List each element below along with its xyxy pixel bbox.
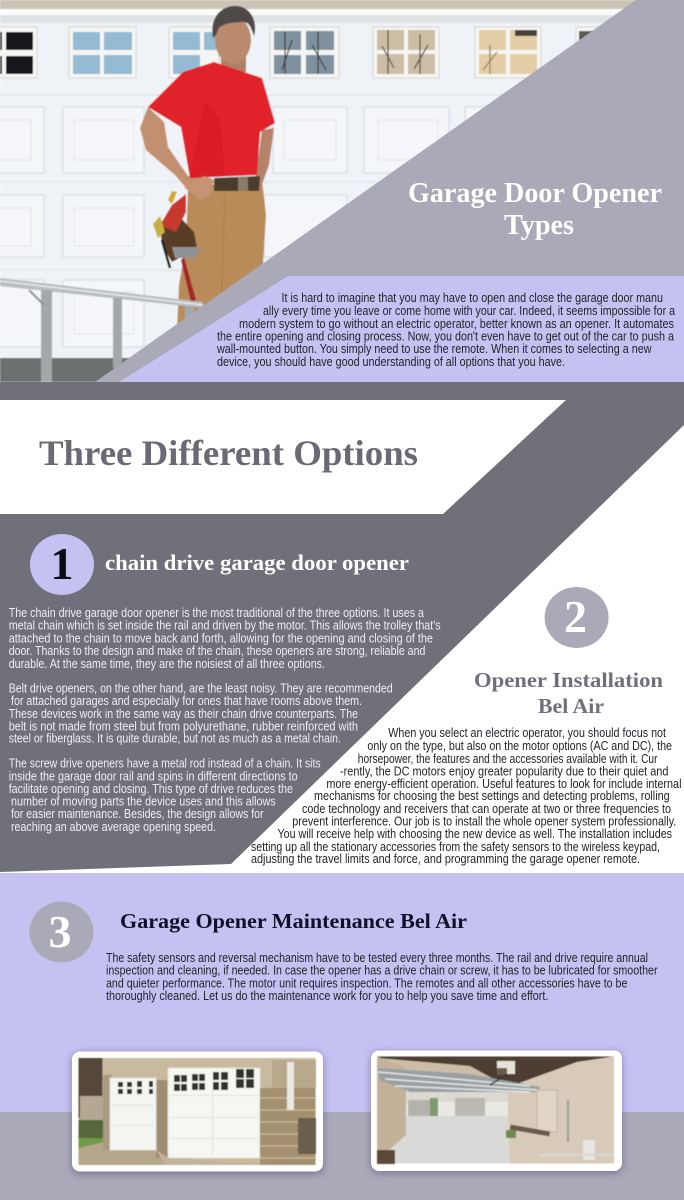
text block: maintenance description: thoroughly cleaned. Let us do the maintenance work for you to help you save time and effort. bbox=[106, 989, 548, 1003]
badge: number 3 bbox=[30, 902, 94, 962]
heading: Opener Installation Bel Air: Bel Air bbox=[538, 694, 604, 718]
man bbox=[140, 6, 275, 330]
heading: chain drive garage door opener: chain drive garage door opener bbox=[105, 550, 409, 575]
heading: Opener Installation Bel Air: Opener Installation bbox=[474, 668, 663, 692]
text block: maintenance description bbox=[106, 951, 658, 1003]
photo: house with white garage doors bbox=[72, 1052, 323, 1174]
heading: Opener Installation Bel Air bbox=[474, 668, 663, 718]
text block: chain drive description: reaching an above average opening speed. bbox=[11, 820, 216, 834]
badge: number 1 bbox=[30, 534, 94, 595]
heading: Garage Door Opener Types: Garage Door Opener bbox=[408, 178, 662, 209]
photo: inside of a garage with opener bbox=[371, 1050, 622, 1173]
text block: chain drive description: for easier maintenance. Besides, the design allows for bbox=[11, 807, 264, 821]
text block: chain drive description: steel or fiberglass. It is quite durable, but not as much as a metal chain. bbox=[9, 732, 341, 746]
heading: Garage Door Opener Types bbox=[408, 178, 662, 241]
hero photo: man in front of a garage door bbox=[0, 0, 684, 382]
text block: chain drive description: inside the garage door rail and spins in different directions to bbox=[9, 770, 298, 784]
panel: intro background bbox=[119, 276, 684, 382]
text block: chain drive description: These devices work in the same way as their chain drive counterparts. The bbox=[9, 707, 358, 721]
text block: chain drive description: Belt drive openers, on the other hand, are the least noisy. They are recommended bbox=[9, 682, 393, 696]
garage door windows bbox=[0, 27, 606, 78]
heading: Three Different Options: Three Different Options bbox=[39, 433, 418, 473]
badge: number 1: 1 bbox=[50, 538, 74, 589]
text block: chain drive description: facilitate opening and closing. This type of drive reduces the bbox=[9, 782, 293, 796]
tool pouch bbox=[153, 191, 201, 302]
panel: grey footer band bbox=[0, 1112, 684, 1200]
text block: chain drive description bbox=[9, 606, 441, 834]
panel: white heading banner bbox=[0, 400, 566, 514]
railing bbox=[0, 278, 203, 382]
text block: chain drive description: metal chain which is set inside the rail and driven by the motor. This allows the trolley that's bbox=[9, 618, 441, 632]
heading: Garage Door Opener Types: Types bbox=[504, 210, 574, 241]
text block: chain drive description: for attached garages and especially for ones that have rooms above them. bbox=[11, 694, 362, 708]
heading: Garage Opener Maintenance Bel Air: Garage Opener Maintenance Bel Air bbox=[120, 909, 467, 933]
text block: chain drive description: The screw drive openers have a metal rod instead of a chain. It sits bbox=[9, 756, 321, 770]
panel: lavender maintenance section bbox=[0, 873, 684, 1112]
text block: opener installation description bbox=[251, 726, 682, 866]
text block: chain drive description: door. Thanks to the design and make of the chain, these openers are strong, reliable and bbox=[9, 644, 425, 658]
grey diagonal title panel bbox=[95, 0, 684, 382]
badge: number 3: 3 bbox=[48, 906, 72, 957]
intro text block: device, you should have good understanding of all options that you have. bbox=[217, 355, 565, 369]
intro text block bbox=[216, 291, 675, 369]
text block: chain drive description: attached to the chain to move back and forth, allowing for the opening and closing of the bbox=[9, 632, 433, 646]
text block: chain drive description: durable. At the same time, they are the noisiest of all three options. bbox=[9, 657, 325, 671]
badge: number 2: 2 bbox=[564, 591, 587, 642]
panel: dark grey chain drive section bbox=[0, 382, 684, 872]
text block: chain drive description: belt is not made from steel but from polyurethane, rubber reinforced with bbox=[9, 720, 358, 734]
text block: chain drive description: number of moving parts the device uses and this allows bbox=[11, 794, 276, 808]
badge: number 2 bbox=[545, 587, 609, 648]
text block: chain drive description: The chain drive garage door opener is the most traditional of the three options. It uses a bbox=[9, 606, 424, 620]
